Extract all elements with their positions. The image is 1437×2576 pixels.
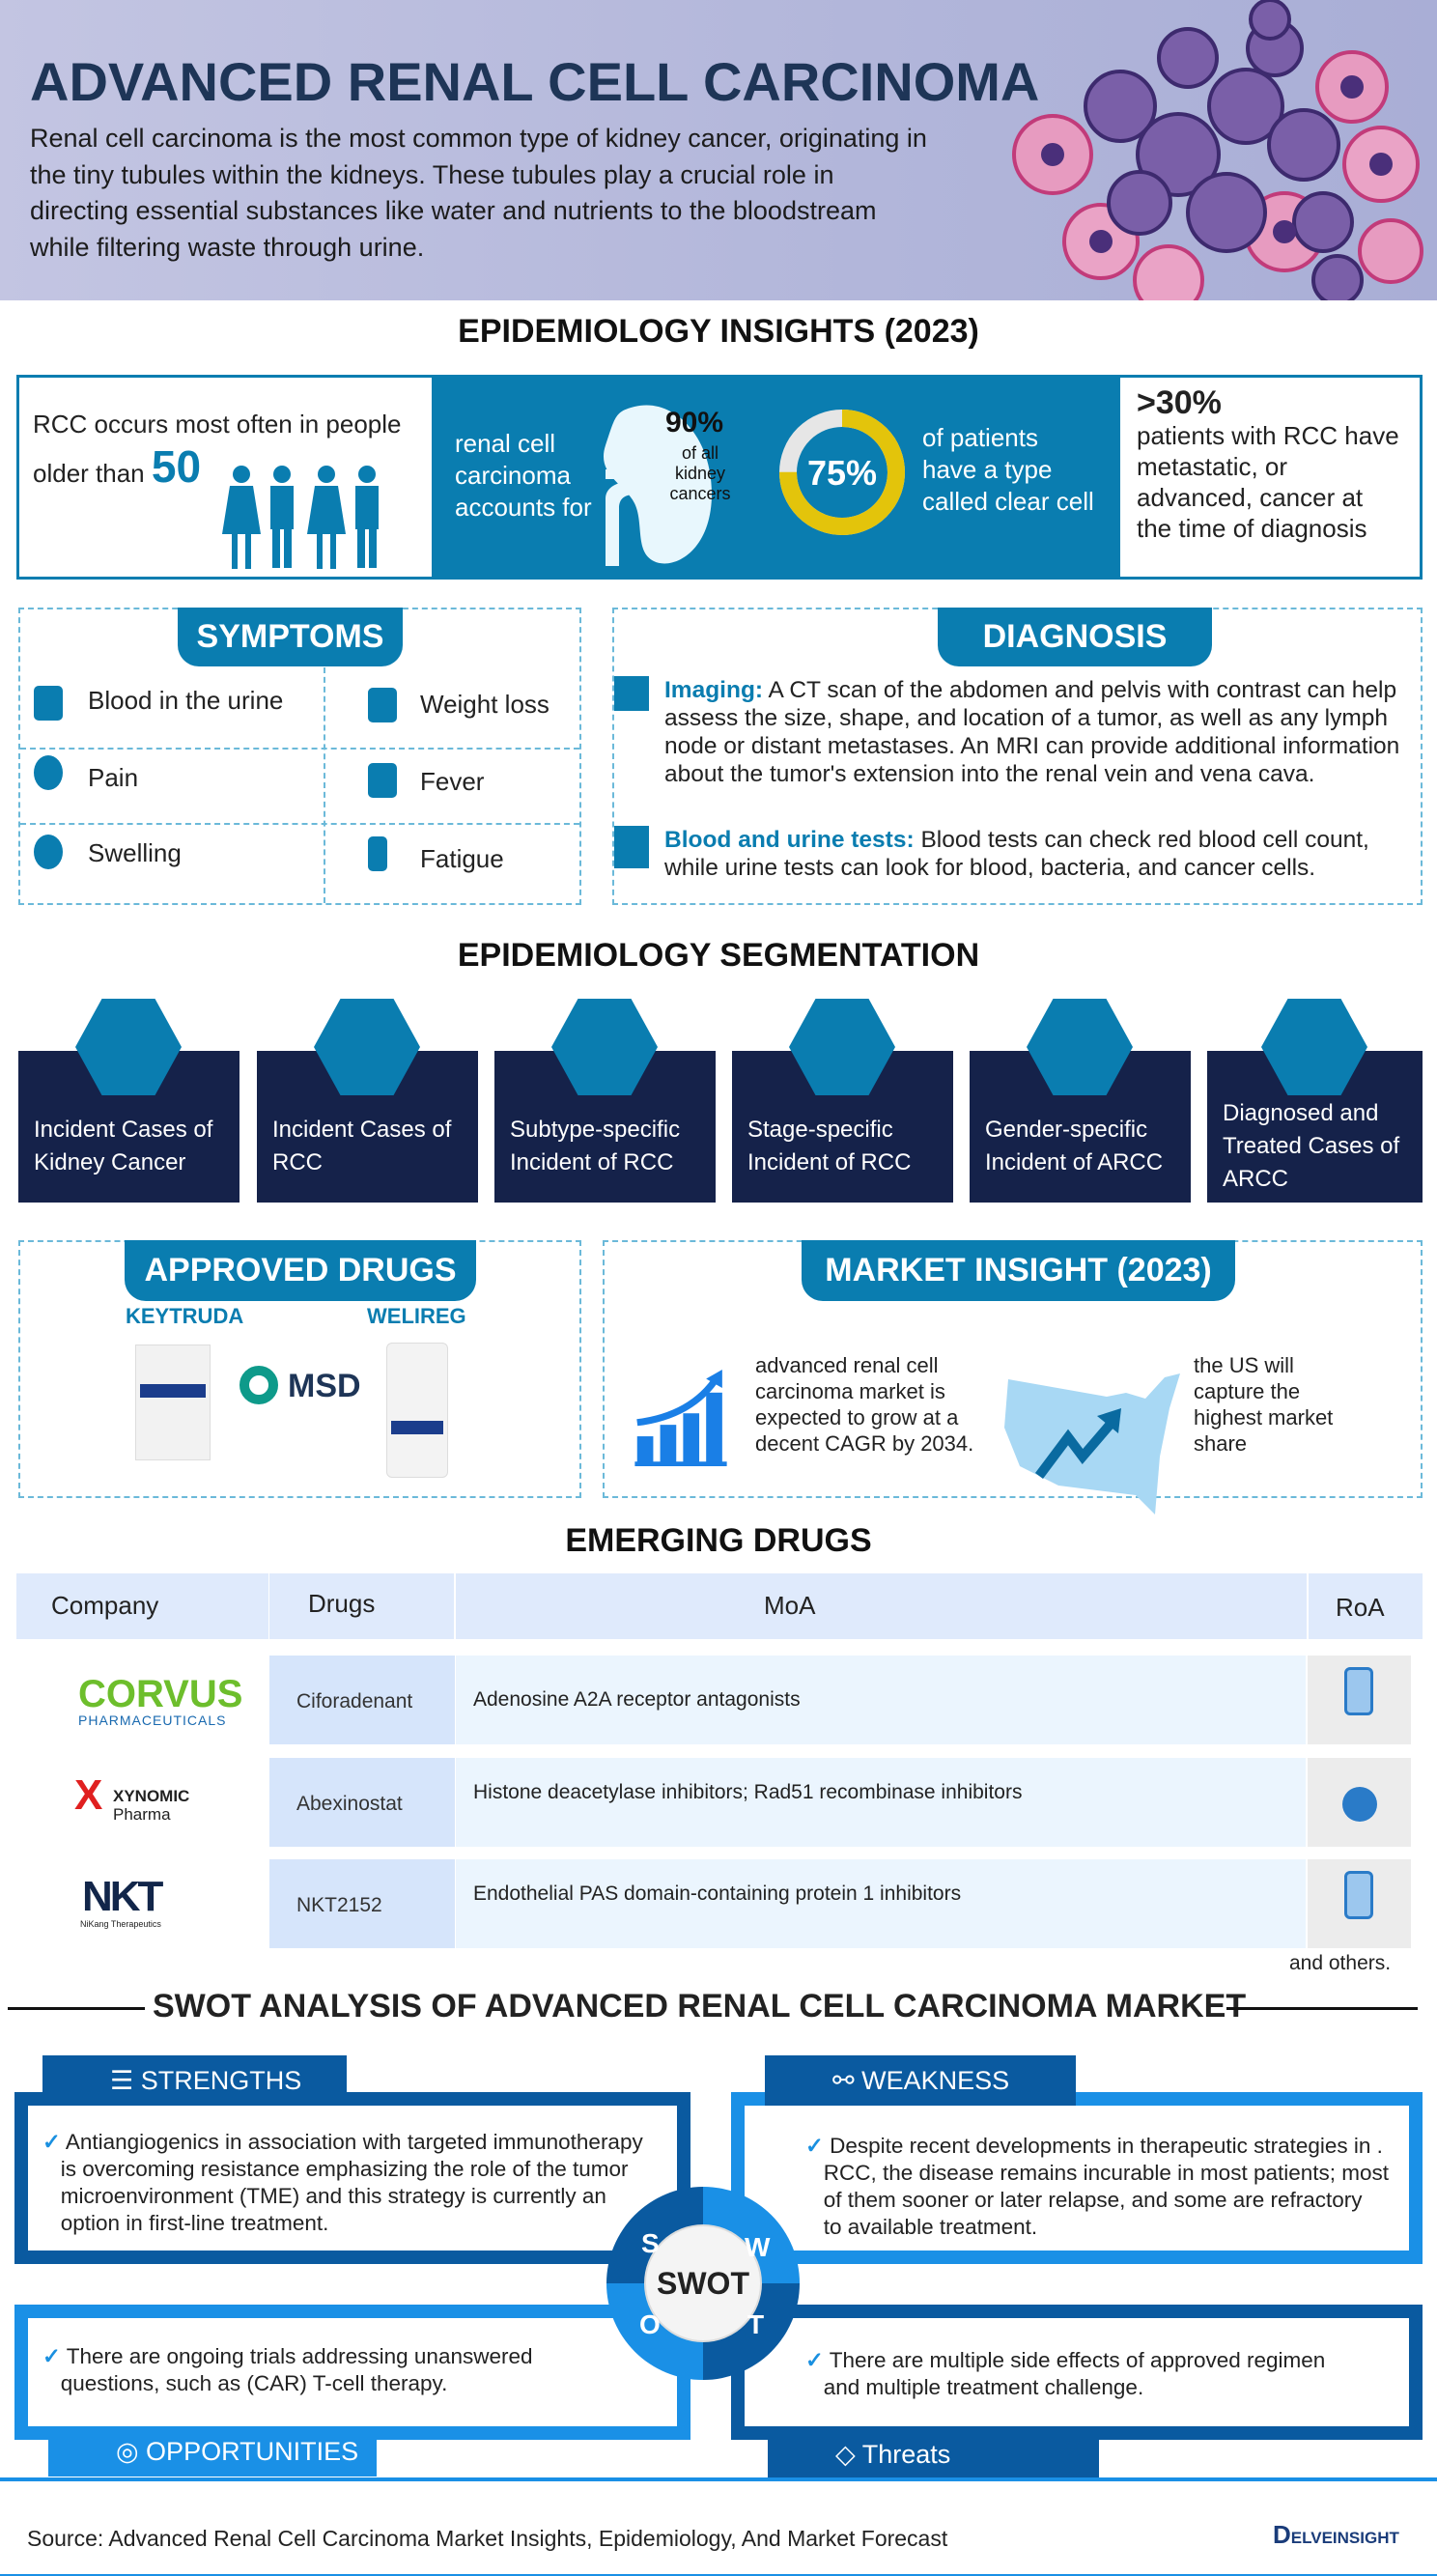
row: xynomic: Pharma <box>113 1805 171 1824</box>
row: corvus: PHARMACEUTICALS <box>78 1713 226 1728</box>
heading: epidemiology segmentation: EPIDEMIOLOGY SEGMENTATION <box>458 937 979 974</box>
SWOT center quadrants: S <box>641 2228 660 2258</box>
panel: weakness <box>731 2092 1423 2264</box>
blue band: cancers <box>669 484 731 503</box>
text: blood and urine tests: Blood and urine tests: Blood tests can check red blood cell count, <box>664 827 1369 853</box>
text: ✓ There are ongoing trials addressing unanswered <box>42 2344 533 2368</box>
row: nkt <box>80 1859 1411 1948</box>
logo: MSD <box>240 1366 361 1404</box>
stat: >30%: metastatic, or <box>1137 452 1287 481</box>
panel: approved drugs <box>18 1240 581 1498</box>
header banner <box>0 0 1437 300</box>
drug: keytruda <box>126 1304 243 1460</box>
card: kidney cancer: Incident Cases of Kidney Cancer <box>34 1117 212 1175</box>
drug: welireg <box>367 1304 466 1478</box>
panel: epidemiology insights <box>16 375 1423 580</box>
panel: symptoms <box>18 608 581 905</box>
symptom list: Weight loss <box>420 690 549 719</box>
logo: DelveInsight: DELVEINSIGHT <box>1273 2520 1399 2549</box>
stat: age 50: RCC occurs most often in people <box>33 410 402 439</box>
stat: >30%: patients with RCC have <box>1137 421 1399 450</box>
symptom: blood in urine <box>34 686 63 721</box>
text: ◇ Threats <box>835 2440 950 2469</box>
hexagon icons <box>75 999 182 1095</box>
text: imaging: Imaging: A CT scan of the abdomen and pelvis with contrast can help <box>664 677 1396 703</box>
logo: MSD: MSD <box>288 1368 361 1404</box>
row: nkt: NKT <box>82 1873 160 1920</box>
card: gender: Gender-specific Incident of ARCC <box>985 1117 1163 1175</box>
SWOT center quadrants: O <box>639 2309 661 2339</box>
symptom list: Pain <box>88 763 138 792</box>
row: xynomic: Histone deacetylase inhibitors; Rad51 recombinase inhibitors <box>473 1781 1022 1803</box>
symptom: weight loss <box>368 688 397 722</box>
text: blood and urine tests: while urine tests can look for blood, bacteria, and cancer cells. <box>664 855 1315 881</box>
intro paragraph: Renal cell carcinoma is the most common type of kidney cancer, originating in <box>30 124 927 153</box>
table header: Company <box>51 1591 158 1620</box>
symptom list: Fever <box>420 767 484 796</box>
text: microenvironment (TME) and this strategy is currently an <box>61 2184 606 2208</box>
text: ✓ Antiangiogenics in association with targeted immunotherapy <box>42 2130 643 2154</box>
text: ◎ OPPORTUNITIES <box>116 2437 358 2466</box>
row: corvus: CORVUS <box>78 1673 242 1715</box>
text: blood and urine tests <box>614 826 1369 881</box>
card: diagnosed treated <box>1207 1051 1423 1203</box>
table header <box>16 1573 1423 1639</box>
table header: MoA <box>764 1591 815 1620</box>
heading tab: symptoms: SYMPTOMS <box>197 618 383 655</box>
card: subtype: Subtype-specific Incident of RCC <box>510 1117 680 1175</box>
symptom: fatigue <box>368 836 387 871</box>
stat: 90%: carcinoma <box>455 461 571 490</box>
icon: US map <box>1004 1373 1180 1514</box>
SWOT center quadrants: W <box>745 2232 771 2262</box>
footer <box>0 2477 1437 2575</box>
chart: 75% donut: 75% <box>807 453 877 493</box>
card: diagnosed treated: Diagnosed and Treated Cases of ARCC <box>1223 1099 1399 1192</box>
panel: opportunities <box>14 2305 690 2440</box>
text: imaging: assess the size, shape, and location of a tumor, as well as any lymph <box>664 705 1388 731</box>
text: and multiple treatment challenge. <box>824 2375 1143 2399</box>
drug: keytruda: KEYTRUDA <box>126 1304 243 1328</box>
heading tab: market insight: MARKET INSIGHT (2023) <box>825 1252 1212 1288</box>
heading: epidemiology insights: EPIDEMIOLOGY INSIGHTS (2023) <box>458 313 979 350</box>
text: ✓ Despite recent developments in therapeutic strategies in . <box>805 2134 1383 2158</box>
stat text: clear cell: have a type <box>922 455 1052 484</box>
card: RCC: Incident Cases of RCC <box>272 1117 451 1175</box>
intro paragraph: while filtering waste through urine. <box>30 232 424 261</box>
title: ADVANCED RENAL CELL CARCINOMA <box>30 51 1039 112</box>
row: nkt: NiKang Therapeutics <box>80 1919 161 1929</box>
table header: RoA <box>1336 1593 1385 1622</box>
card: gender <box>970 1051 1191 1203</box>
heading: emerging drugs: EMERGING DRUGS <box>565 1522 872 1559</box>
note: and others: and others. <box>1289 1952 1391 1974</box>
stat: age 50: older than 50 <box>33 441 201 492</box>
text: imaging: node or distant metastases. An MRI can provide additional information <box>664 733 1399 759</box>
panel: strengths <box>14 2092 690 2264</box>
text: questions, such as (CAR) T-cell therapy. <box>61 2371 447 2395</box>
heading tab: market insight <box>802 1240 1235 1301</box>
card: stage <box>732 1051 953 1203</box>
intro paragraph <box>30 124 927 261</box>
stat: >30%: >30% <box>1137 384 1222 421</box>
symptom list: Fatigue <box>420 844 504 873</box>
SWOT center quadrants <box>606 2187 800 2380</box>
row: nkt: NKT2152 <box>296 1894 382 1916</box>
card: stage: Stage-specific Incident of RCC <box>747 1117 911 1175</box>
row: corvus <box>78 1656 1411 1744</box>
SWOT center quadrants: T <box>747 2309 764 2339</box>
text: to available treatment. <box>824 2215 1037 2239</box>
stat: >30%: the time of diagnosis <box>1137 514 1367 543</box>
chart icon: growth <box>634 1370 727 1466</box>
text: is overcoming resistance emphasizing the role of the tumor <box>61 2157 629 2181</box>
blue band <box>432 378 1120 577</box>
chart: 75% donut <box>779 410 905 535</box>
symptom: pain <box>34 755 63 790</box>
stat text: clear cell <box>922 423 1094 516</box>
table: emerging drugs <box>16 1573 1423 1974</box>
row: nkt: Endothelial PAS domain-containing protein 1 inhibitors <box>473 1882 961 1905</box>
row: xynomic: XYNOMIC <box>113 1787 189 1805</box>
stat: 90%: accounts for <box>455 493 592 522</box>
heading tab: diagnosis <box>938 608 1212 666</box>
blue band: 90% <box>665 407 723 439</box>
stat: >30%: advanced, cancer at <box>1137 483 1363 512</box>
text: CAGR: advanced renal cell carcinoma market is expected to grow at a decent CAGR by 2034. <box>755 1353 973 1456</box>
symptom: swelling <box>34 835 63 869</box>
icon: people <box>222 466 379 569</box>
heading tab: approved drugs: APPROVED DRUGS <box>144 1252 457 1288</box>
stat text: clear cell: called clear cell <box>922 487 1094 516</box>
stat: >30% <box>1137 384 1399 543</box>
row: xynomic <box>74 1758 1411 1847</box>
symptom: fever <box>368 763 397 798</box>
symptom list: Swelling <box>88 838 182 867</box>
text: option in first-line treatment. <box>61 2211 328 2235</box>
text: ☰ STRENGTHS <box>110 2066 301 2095</box>
heading tab: approved drugs <box>125 1240 476 1301</box>
card: kidney cancer <box>18 1051 240 1203</box>
symptom list: Blood in the urine <box>88 686 283 715</box>
intro paragraph: directing essential substances like water and nutrients to the bloodstream <box>30 196 877 225</box>
stat: age 50 <box>33 410 402 492</box>
heading tab: symptoms <box>178 608 403 666</box>
panel: threats <box>731 2305 1423 2440</box>
row: xynomic: X <box>74 1771 102 1819</box>
heading: SWOT: SWOT ANALYSIS OF ADVANCED RENAL CELL CARCINOMA MARKET <box>153 1988 1246 2024</box>
intro paragraph: the tiny tubules within the kidneys. These tubules play a crucial role in <box>30 160 833 189</box>
panel: diagnosis <box>612 608 1423 905</box>
stat: 90% <box>455 429 592 522</box>
card: subtype <box>494 1051 716 1203</box>
icon: kidney <box>604 406 712 566</box>
panel: market insight <box>603 1240 1423 1498</box>
heading tab: diagnosis: DIAGNOSIS <box>983 618 1167 655</box>
row: corvus: Ciforadenant <box>296 1690 412 1713</box>
text: ⚯ WEAKNESS <box>832 2066 1009 2095</box>
card: RCC <box>257 1051 478 1203</box>
drug: welireg: WELIREG <box>367 1304 466 1328</box>
table header: Drugs <box>308 1589 375 1618</box>
symptom list <box>34 686 549 873</box>
stat text: clear cell: of patients <box>922 423 1038 452</box>
text: US share: the US will capture the highest market share <box>1194 1353 1333 1456</box>
stat: 90%: renal cell <box>455 429 555 458</box>
blue band: of all <box>682 443 718 463</box>
row: xynomic: Abexinostat <box>296 1793 403 1815</box>
illustration: cells <box>1012 0 1423 300</box>
blue band: kidney <box>675 464 725 483</box>
source text: Source: Advanced Renal Cell Carcinoma Market Insights, Epidemiology, And Market Forecast <box>27 2526 947 2551</box>
SWOT center quadrants: SWOT <box>657 2266 749 2301</box>
row: corvus: Adenosine A2A receptor antagonists <box>473 1688 801 1711</box>
text: of them sooner or later relapse, and some are refractory <box>824 2188 1363 2212</box>
text: ✓ There are multiple side effects of approved regimen <box>805 2348 1325 2372</box>
text: RCC, the disease remains incurable in most patients; most <box>824 2161 1389 2185</box>
text: imaging <box>614 676 1399 787</box>
text: imaging: about the tumor's extension into the renal vein and vena cava. <box>664 761 1314 787</box>
